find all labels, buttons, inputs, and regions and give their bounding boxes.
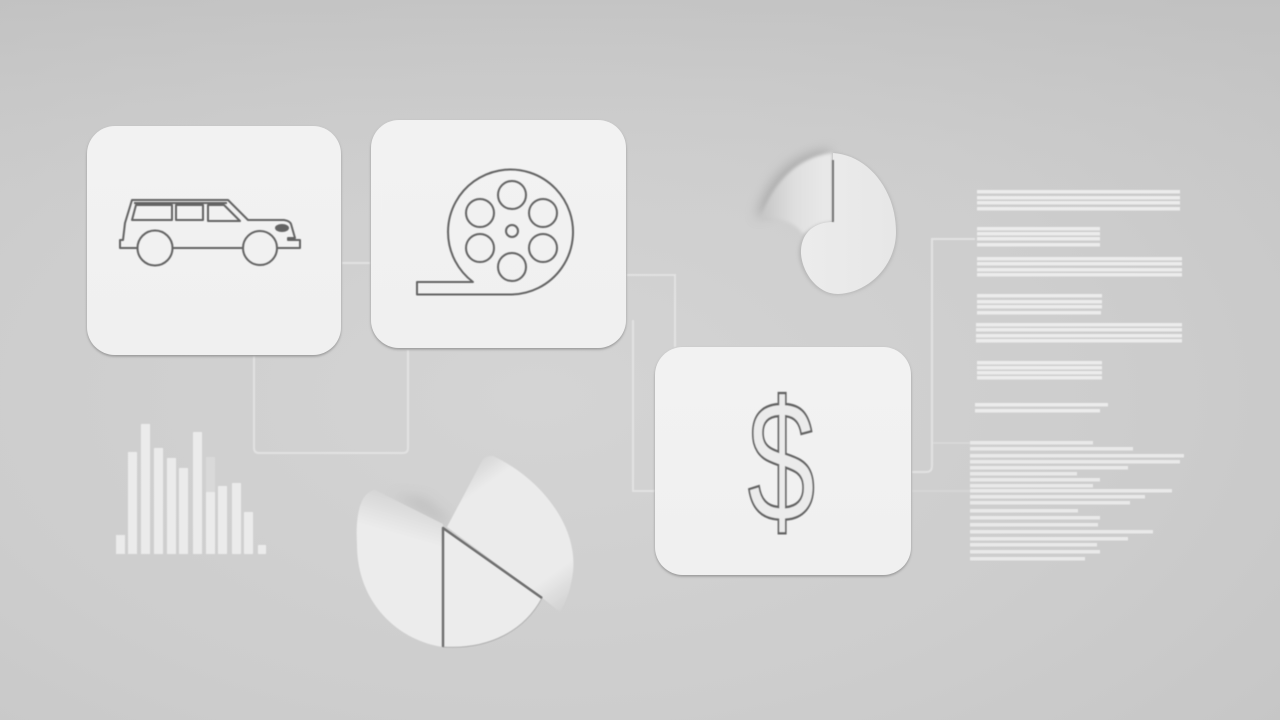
small pie chart bbox=[756, 150, 897, 295]
icon: car bbox=[120, 200, 300, 266]
text lines: lower list bbox=[970, 441, 1184, 560]
large pie chart bbox=[357, 456, 573, 647]
panel: car card bbox=[87, 126, 341, 355]
icon: dollar sign: $ bbox=[748, 364, 815, 558]
panel: dollar card bbox=[655, 347, 911, 575]
text lines: upper list bbox=[975, 190, 1182, 412]
icon: film reel bbox=[417, 170, 573, 294]
bar chart bbox=[116, 424, 266, 554]
connector lines bbox=[254, 239, 975, 491]
panel: film reel card bbox=[371, 120, 626, 348]
